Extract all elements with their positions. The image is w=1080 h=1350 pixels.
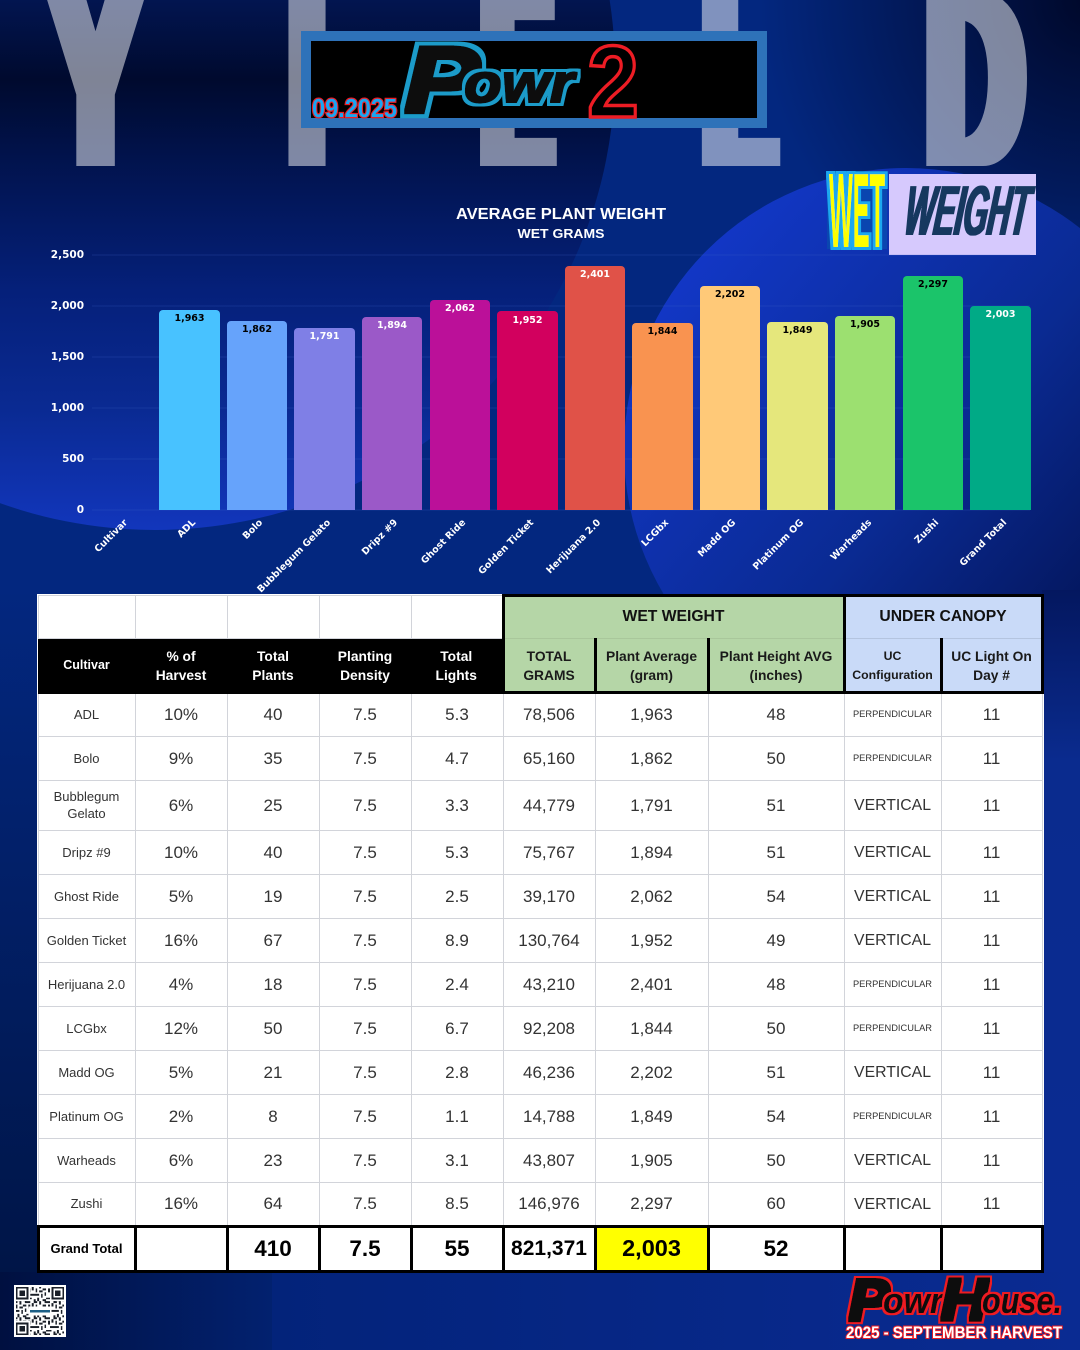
table group headers: PERPENDICULAR <box>853 709 932 719</box>
bar value labels: 1,894 <box>377 320 407 331</box>
table group headers: 48 <box>767 975 785 994</box>
y axis labels: 0 <box>77 504 84 516</box>
table group headers: Madd OG <box>58 1064 115 1080</box>
table column headers: Harvest <box>156 668 206 682</box>
table column headers: UC <box>884 648 901 662</box>
x axis labels: Cultivar <box>93 517 130 555</box>
table group headers: 11 <box>983 1063 1000 1082</box>
table group headers: VERTICAL <box>854 1152 931 1169</box>
grand total row <box>50 1228 789 1270</box>
table group headers: 51 <box>767 843 785 862</box>
table column headers: Day # <box>973 668 1010 682</box>
x axis labels: Platinum OG <box>751 517 806 573</box>
table group headers: 48 <box>767 705 785 724</box>
table column headers: Density <box>340 668 390 682</box>
logo: PowrHouse, September harvest: 2025 - SEPTEMBER HARVEST <box>846 1324 1062 1342</box>
table group headers: Platinum OG <box>49 1108 124 1124</box>
table group headers: Bubblegum Gelato <box>54 789 119 821</box>
table group headers: 2% <box>169 1107 193 1126</box>
table group headers: 11 <box>983 1019 1000 1038</box>
table group headers: VERTICAL <box>854 932 931 949</box>
bar value labels: 2,202 <box>715 289 745 300</box>
table group headers: 2.8 <box>445 1063 469 1082</box>
x axis labels: Warheads <box>829 517 874 563</box>
bar value labels: 1,844 <box>647 326 678 337</box>
grand total row: 821,371 <box>511 1237 587 1260</box>
table group headers: 54 <box>767 1107 785 1126</box>
table group headers: 40 <box>264 705 282 724</box>
table group headers: 11 <box>983 1151 1000 1170</box>
table group headers: 2.5 <box>445 887 469 906</box>
grand total row: 410 <box>254 1236 292 1261</box>
bar value labels: 2,297 <box>918 279 948 290</box>
table group headers: Bolo <box>73 750 100 766</box>
table group headers: 2,297 <box>630 1194 673 1213</box>
table group headers: 50 <box>767 1019 785 1038</box>
bar value labels: 1,862 <box>242 324 272 335</box>
x axis labels: Zushi <box>913 517 941 546</box>
table group headers: 51 <box>767 1063 785 1082</box>
logo: Powr 2 banner: P <box>404 27 480 132</box>
table group headers: 7.5 <box>353 1019 377 1038</box>
grand total row: Grand Total <box>50 1241 122 1256</box>
table group headers: 25 <box>264 796 282 815</box>
table group headers: 11 <box>983 796 1000 815</box>
table group headers: 39,170 <box>523 887 575 906</box>
data table <box>36 594 1044 1273</box>
table column headers: Configuration <box>852 668 933 682</box>
chart title <box>456 206 666 241</box>
x axis labels: Dripz #9 <box>360 517 400 558</box>
table column headers: GRAMS <box>523 668 575 682</box>
bar value labels: 2,062 <box>445 303 475 314</box>
table group headers: 9% <box>169 749 193 768</box>
table group headers: 1.1 <box>445 1107 469 1126</box>
bar value labels: 2,003 <box>985 309 1016 320</box>
table group headers: VERTICAL <box>854 888 931 905</box>
table group headers: 3.3 <box>445 796 469 815</box>
table group headers: 7.5 <box>353 931 377 950</box>
table group headers: PERPENDICULAR <box>853 1023 932 1033</box>
table group headers: 4% <box>169 975 193 994</box>
grand total row: 55 <box>444 1236 470 1261</box>
table group headers: 2,062 <box>630 887 673 906</box>
y axis labels: 2,000 <box>51 300 84 312</box>
table group headers: 65,160 <box>523 749 575 768</box>
table group headers: 7.5 <box>353 749 377 768</box>
table group headers: 35 <box>264 749 282 768</box>
y axis labels: 1,000 <box>51 402 84 414</box>
table group headers: 3.1 <box>445 1151 469 1170</box>
table group headers: 16% <box>164 931 198 950</box>
table group headers: 7.5 <box>353 1107 377 1126</box>
table group headers: VERTICAL <box>854 797 931 814</box>
logo: Powr 2 banner: 2 <box>587 25 639 139</box>
table group headers: 50 <box>264 1019 282 1038</box>
table group headers: PERPENDICULAR <box>853 979 932 989</box>
x axis labels: LCGbx <box>639 517 671 549</box>
table column headers: Cultivar <box>63 658 110 672</box>
table group headers: 92,208 <box>523 1019 575 1038</box>
table group headers: 5% <box>169 1063 193 1082</box>
table group headers: 50 <box>767 749 785 768</box>
table group headers: 8.5 <box>445 1194 469 1213</box>
table group headers: 60 <box>767 1194 785 1213</box>
table group headers: 7.5 <box>353 796 377 815</box>
x axis labels: Madd OG <box>696 517 738 560</box>
table group headers: 5% <box>169 887 193 906</box>
table group headers: 10% <box>164 843 198 862</box>
table group headers: 46,236 <box>523 1063 575 1082</box>
table group headers: 11 <box>983 749 1000 768</box>
x axis labels: Grand Total <box>958 517 1009 569</box>
table group headers: 67 <box>264 931 282 950</box>
table group headers: 1,862 <box>630 749 673 768</box>
table column headers: Plant Average <box>606 648 697 664</box>
table group headers: 11 <box>983 931 1000 950</box>
table group headers: 7.5 <box>353 1063 377 1082</box>
table group headers: 7.5 <box>353 1151 377 1170</box>
table group headers: 16% <box>164 1194 198 1213</box>
logo: PowrHouse, September harvest: P <box>849 1268 889 1333</box>
table group headers: 1,849 <box>630 1107 673 1126</box>
chart title: WET GRAMS <box>518 226 605 241</box>
table group headers: 6.7 <box>445 1019 469 1038</box>
table group headers: 1,894 <box>630 843 673 862</box>
logo: PowrHouse, September harvest: ouse. <box>982 1280 1062 1321</box>
table group headers: 1,963 <box>630 705 673 724</box>
table group headers: 11 <box>983 975 1000 994</box>
table group headers: 23 <box>264 1151 282 1170</box>
table column headers: (inches) <box>750 668 802 682</box>
bar value labels: 2,401 <box>580 269 610 280</box>
table group headers: LCGbx <box>66 1020 107 1036</box>
table group headers: Herijuana 2.0 <box>48 976 125 992</box>
table group headers: Dripz #9 <box>62 844 111 860</box>
table group headers: UNDER CANOPY <box>879 608 1007 625</box>
table group headers: 2.4 <box>445 975 469 994</box>
table column headers: % of <box>166 648 196 664</box>
table group headers: VERTICAL <box>854 1196 931 1213</box>
icon: QR code <box>14 1285 66 1337</box>
table group headers: 7.5 <box>353 975 377 994</box>
bar value labels: 1,952 <box>512 315 543 326</box>
table group headers: 18 <box>264 975 282 994</box>
table group headers: 8 <box>268 1107 278 1126</box>
logo: PowrHouse, September harvest: H <box>941 1268 988 1333</box>
table group headers: 4.7 <box>445 749 469 768</box>
heading badge: WET WEIGHT: WET <box>829 152 885 270</box>
table group headers: 7.5 <box>353 843 377 862</box>
y axis labels <box>51 249 84 516</box>
table group headers: 19 <box>264 887 282 906</box>
table group headers: 146,976 <box>518 1194 580 1213</box>
table group headers: 8.9 <box>445 931 469 950</box>
table group headers: ADL <box>74 707 99 722</box>
table group headers: 130,764 <box>518 931 580 950</box>
table group headers: 11 <box>983 705 1000 724</box>
table group headers: 7.5 <box>353 705 377 724</box>
table group headers: 11 <box>983 1107 1000 1126</box>
table group headers: 12% <box>164 1019 198 1038</box>
logo: Powr 2 banner: owr <box>464 52 577 114</box>
bar value labels: 1,905 <box>850 319 880 330</box>
table group headers: 64 <box>264 1194 282 1213</box>
table group headers: 14,788 <box>523 1107 575 1126</box>
grand total row: 52 <box>763 1236 789 1261</box>
table group headers: 5.3 <box>445 705 469 724</box>
x axis labels: Herijuana 2.0 <box>544 517 603 576</box>
table group headers: 50 <box>767 1151 785 1170</box>
table group headers: 11 <box>983 887 1000 906</box>
table group headers: 2,401 <box>630 975 673 994</box>
table column headers: (gram) <box>630 668 673 682</box>
bar chart: average plant weight <box>51 206 1031 595</box>
x axis labels: Golden Ticket <box>477 517 536 577</box>
table column headers: Lights <box>436 668 477 682</box>
logo: Powr 2 banner <box>301 25 767 139</box>
table group headers: 51 <box>767 796 785 815</box>
table column headers: Plants <box>252 668 294 682</box>
table column headers: Planting <box>338 648 392 664</box>
table group headers: 54 <box>767 887 785 906</box>
x axis labels: Bolo <box>241 517 265 542</box>
chart title: AVERAGE PLANT WEIGHT <box>456 206 666 223</box>
logo: Powr 2 banner: 09.2025 <box>312 93 397 123</box>
bar value labels: 1,791 <box>309 331 340 342</box>
table group headers: Ghost Ride <box>54 888 119 904</box>
table group headers: WET WEIGHT <box>623 608 724 625</box>
table group headers: 7.5 <box>353 887 377 906</box>
table group headers: 1,791 <box>630 796 673 815</box>
x axis labels: Ghost Ride <box>419 517 468 566</box>
table column headers: Total <box>257 648 289 664</box>
table group headers: 78,506 <box>523 705 575 724</box>
table group headers: Golden Ticket <box>47 932 126 948</box>
y axis labels: 500 <box>62 453 84 465</box>
x axis labels <box>93 517 1009 595</box>
table group headers: 40 <box>264 843 282 862</box>
table group headers: 5.3 <box>445 843 469 862</box>
table group headers: 75,767 <box>523 843 575 862</box>
table group headers: 1,844 <box>630 1019 673 1038</box>
table group headers: 21 <box>264 1063 282 1082</box>
grand total row: 2,003 <box>622 1235 681 1261</box>
table group headers: 43,210 <box>523 975 575 994</box>
x axis labels: ADL <box>175 517 198 540</box>
bars <box>159 266 1031 510</box>
table group headers: 1,952 <box>630 931 673 950</box>
table group headers: 6% <box>169 796 193 815</box>
big title letters: YIELD <box>47 0 1027 180</box>
table column headers: Plant Height AVG <box>720 648 832 664</box>
table group headers: 44,779 <box>523 796 575 815</box>
table group headers: 6% <box>169 1151 193 1170</box>
table column headers: TOTAL <box>527 648 571 664</box>
logo: PowrHouse, September harvest: owr <box>883 1280 945 1321</box>
grand total row: 7.5 <box>349 1236 381 1261</box>
table group headers: 11 <box>983 843 1000 862</box>
table group headers: 2,202 <box>630 1063 673 1082</box>
table group headers: VERTICAL <box>854 844 931 861</box>
table group headers: 10% <box>164 705 198 724</box>
y axis labels: 2,500 <box>51 249 84 261</box>
table column headers <box>38 639 1041 691</box>
table group headers: PERPENDICULAR <box>853 753 932 763</box>
y axis labels: 1,500 <box>51 351 84 363</box>
table column headers: UC Light On <box>951 648 1032 664</box>
table group headers: 43,807 <box>523 1151 575 1170</box>
table group headers <box>38 597 1041 1270</box>
bar value labels: 1,963 <box>174 313 205 324</box>
x axis labels: Bubblegum Gelato <box>255 517 333 595</box>
bar value labels <box>174 269 1016 342</box>
table group headers: 1,905 <box>630 1151 673 1170</box>
bar value labels: 1,849 <box>782 325 813 336</box>
table group headers: PERPENDICULAR <box>853 1111 932 1121</box>
table group headers: Warheads <box>57 1152 116 1168</box>
table group headers: VERTICAL <box>854 1064 931 1081</box>
table group headers: 7.5 <box>353 1194 377 1213</box>
table group headers: 11 <box>983 1194 1000 1213</box>
table group headers: Zushi <box>71 1196 102 1211</box>
table group headers: 49 <box>767 931 785 950</box>
table column headers: Total <box>440 648 472 664</box>
